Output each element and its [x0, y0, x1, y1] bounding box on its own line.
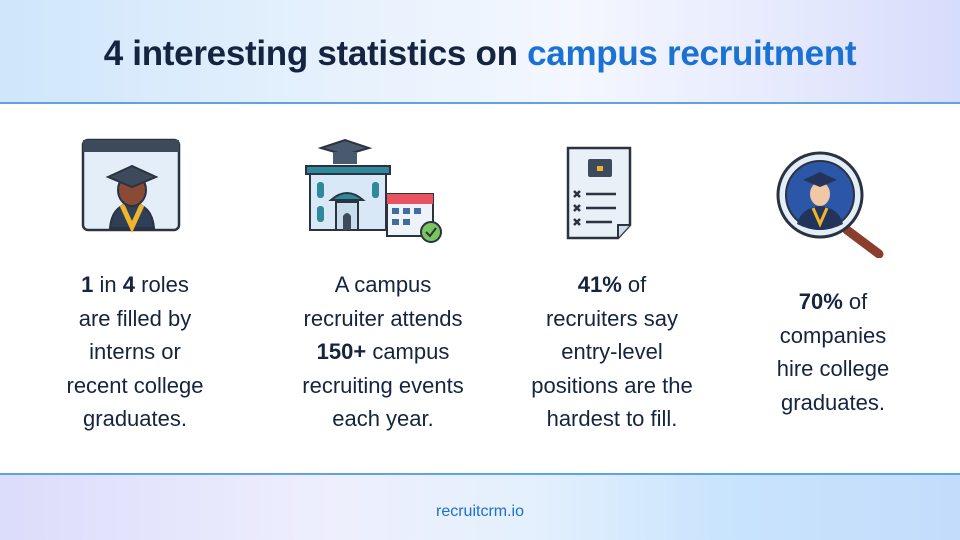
title: 4 interesting statistics on campus recruitment	[104, 34, 856, 73]
stat 2 text: 150+ campus	[317, 339, 449, 364]
stat 4 text: 70% of	[799, 289, 867, 314]
stat 1 text: 1 in 4 roles	[81, 272, 189, 297]
icon: graduate portrait	[82, 138, 180, 233]
stat 4 text: companies	[780, 322, 886, 348]
stat 3 text: positions are the	[531, 372, 693, 398]
icon: job document	[566, 146, 632, 240]
stat 2 text	[302, 272, 464, 431]
icon: magnifying glass with graduate	[776, 152, 884, 258]
stat 2 text: recruiter attends	[304, 306, 462, 330]
stat 2 text: each year.	[332, 406, 434, 431]
stat 3 text: hardest to fill.	[547, 406, 677, 431]
stat 4 text: hire college	[777, 356, 889, 381]
stat 2 text: recruiting events	[302, 372, 464, 398]
stat 3 text: 41% of	[578, 272, 646, 297]
stat 1 text: are filled by	[79, 306, 191, 330]
stat 1 text	[66, 272, 203, 431]
stat 4 text: graduates.	[781, 390, 885, 414]
header band	[0, 0, 960, 104]
stat 1 text: recent college	[66, 372, 203, 398]
footer brand: recruitcrm.io	[436, 503, 524, 520]
stat 4 text	[777, 289, 889, 414]
footer band	[0, 473, 960, 540]
stat 2 text: A campus	[335, 272, 431, 297]
stat 3 text	[531, 272, 693, 431]
icon: campus building with calendar	[305, 139, 442, 243]
stat 1 text: graduates.	[83, 406, 187, 431]
stat 3 text: recruiters say	[546, 306, 678, 330]
stat 1 text: interns or	[89, 339, 181, 364]
stat 3 text: entry-level	[561, 339, 663, 364]
